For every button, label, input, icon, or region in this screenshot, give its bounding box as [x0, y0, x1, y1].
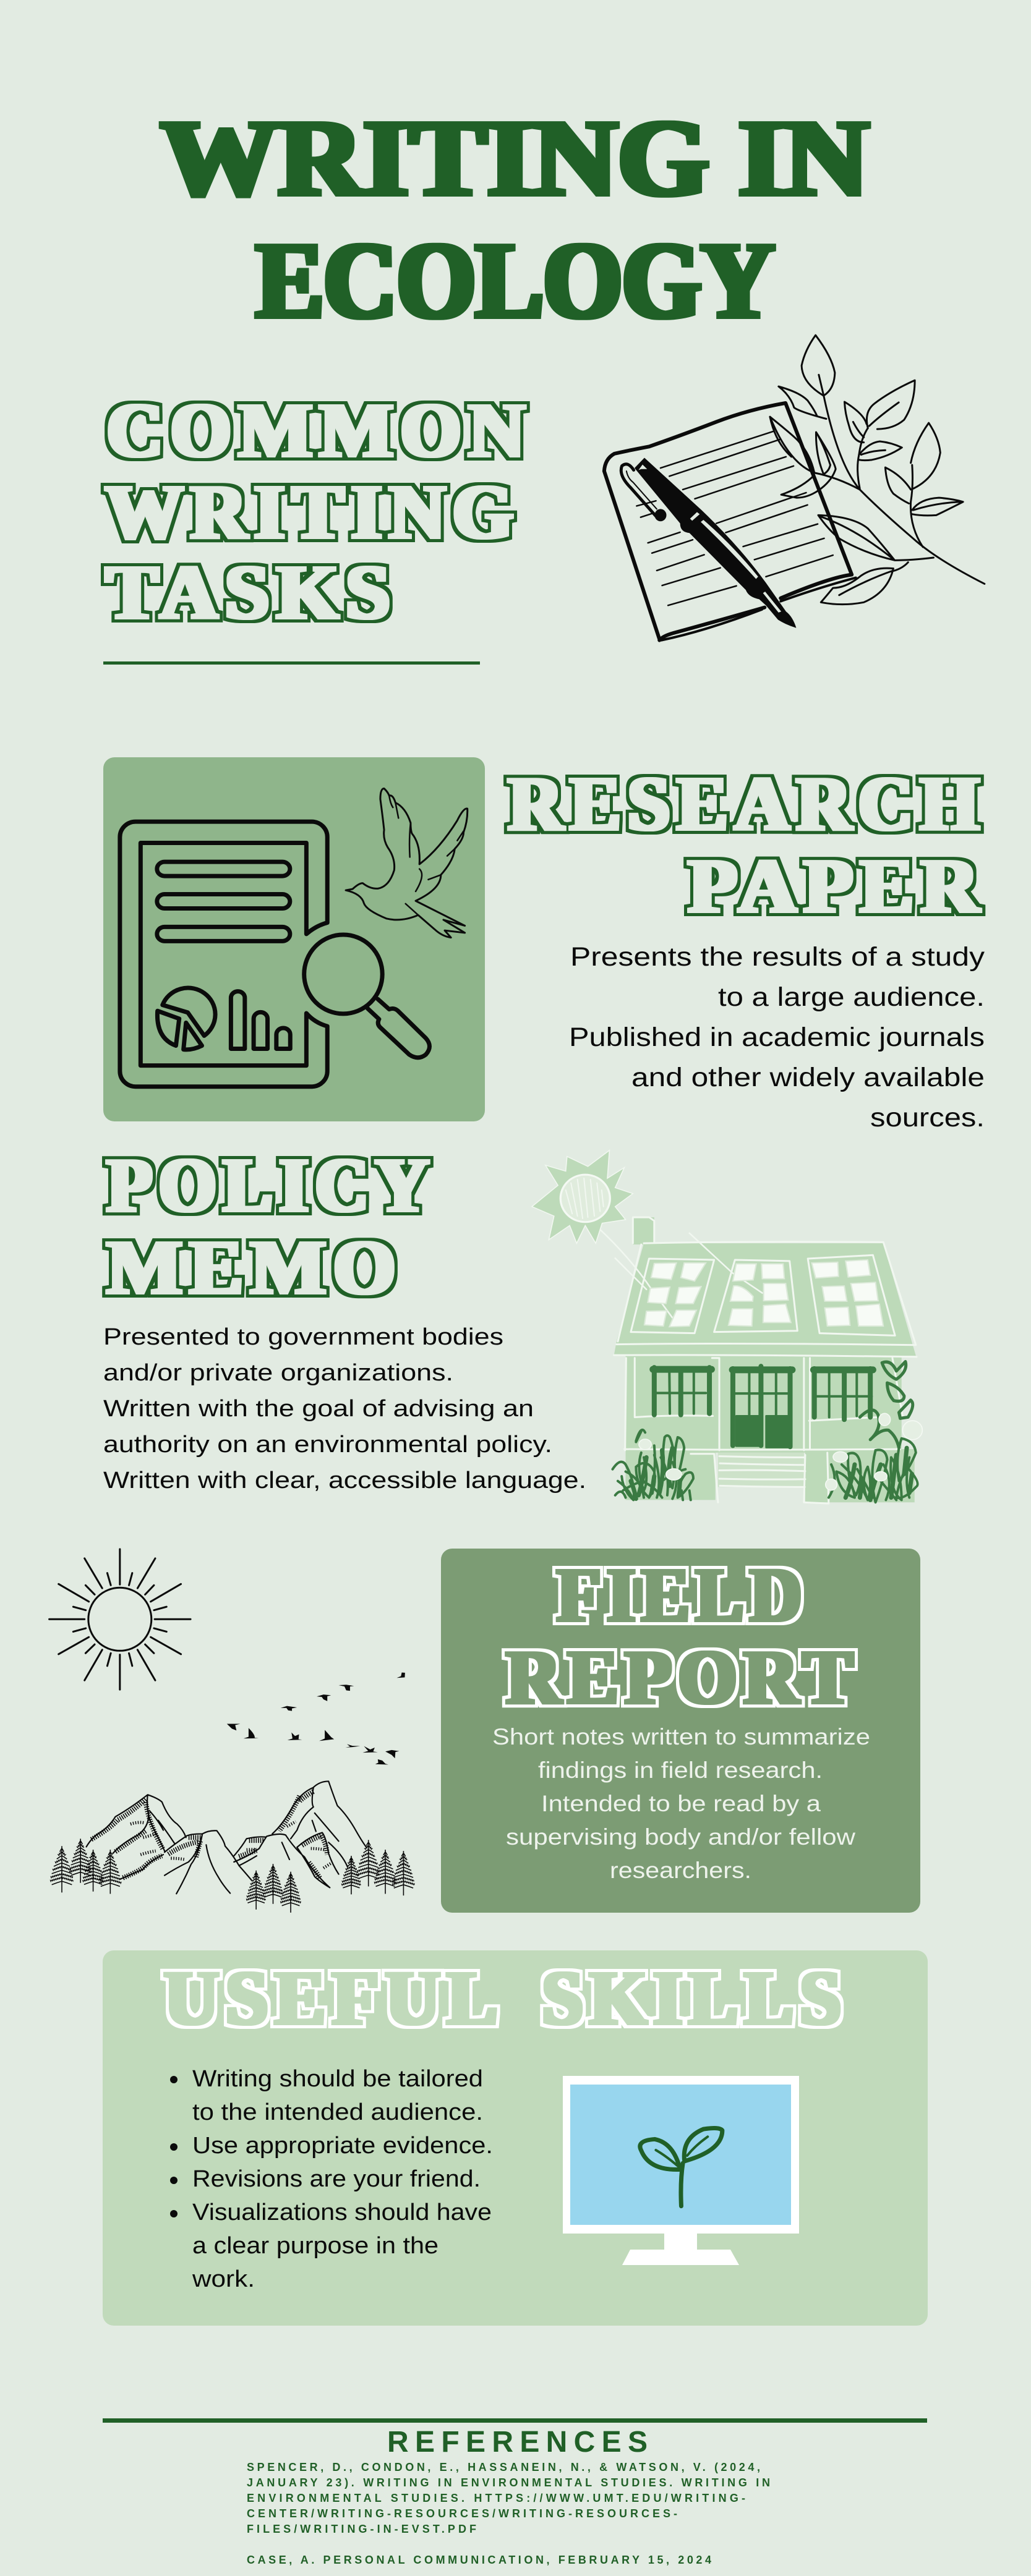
list: skills: a clear purpose in the [192, 2233, 438, 2259]
heading: field report: REPORT [507, 1635, 860, 1720]
heading: references: REFERENCES [387, 2426, 648, 2459]
text: references list: CENTER/WRITING-RESOURCES/WRITING-RESOURCES- [247, 2507, 677, 2520]
heading: useful skills: USEFUL [165, 1956, 505, 2041]
text: field report description: Intended to be read by a [541, 1791, 821, 1816]
heading: useful skills [165, 1956, 848, 2041]
illustration: sun, birds, mountains [49, 1549, 414, 1913]
list: skills: Use appropriate evidence. [192, 2133, 493, 2159]
text: research paper description: to a large audience. [718, 982, 985, 1012]
text: policy memo description: Written with the goal of advising an [103, 1396, 534, 1422]
text: research paper description [569, 942, 985, 1133]
text: research paper description: and other widely available [631, 1063, 985, 1092]
list: skills: Revisions are your friend. [192, 2166, 481, 2192]
heading: research paper: RESEARCH [508, 762, 986, 847]
icon: notebook, pen and leaves [604, 335, 985, 640]
dove [346, 788, 468, 938]
heading: common writing tasks: COMMON [107, 388, 533, 474]
title [161, 98, 869, 341]
text: field report description [492, 1724, 870, 1883]
sun [49, 1549, 190, 1690]
text: references list: CASE, A. PERSONAL COMMUNICATION, FEBRUARY 15, 2024 [247, 2554, 711, 2566]
text: policy memo description: Written with clear, accessible language. [103, 1468, 586, 1494]
pine trees [50, 1838, 414, 1913]
text: policy memo description: Presented to government bodies [103, 1324, 503, 1350]
birds [227, 1672, 405, 1765]
pen [621, 458, 796, 628]
white blossoms [639, 1413, 922, 1490]
left bush [612, 1430, 693, 1500]
list: skills: Visualizations should have [192, 2200, 492, 2225]
right bush [829, 1439, 918, 1502]
text: references list: JANUARY 23). WRITING IN ENVIRONMENTAL STUDIES. WRITING IN [247, 2476, 770, 2489]
text: references list [247, 2461, 770, 2566]
pie chart and bars [157, 988, 290, 1050]
heading: policy memo: MEMO [107, 1225, 403, 1311]
heading: research paper: PAPER [688, 844, 986, 929]
text: field report description: researchers. [610, 1858, 751, 1883]
text: policy memo description: authority on an environmental policy. [103, 1432, 552, 1458]
text: research paper description: Presents the results of a study [570, 942, 985, 972]
text: field report description: findings in field research. [538, 1758, 823, 1783]
list: skills: work. [192, 2266, 255, 2292]
heading: common writing tasks: WRITING [106, 470, 521, 555]
heading: field report [507, 1553, 860, 1720]
text: policy memo description: and/or private organizations. [103, 1360, 453, 1386]
panel: useful skills [103, 1950, 928, 2326]
notebook [604, 403, 856, 640]
heading: useful skills: SKILLS [542, 1956, 848, 2041]
text: research paper description: sources. [870, 1103, 985, 1133]
heading: policy memo [107, 1143, 436, 1311]
heading: policy memo: POLICY [107, 1143, 436, 1228]
sun [532, 1150, 633, 1243]
document [120, 822, 327, 1087]
text: policy memo description [103, 1324, 586, 1494]
title: WRITING IN [161, 98, 869, 219]
title: ECOLOGY [256, 220, 774, 341]
icon: monitor with sprout [563, 2076, 799, 2265]
panel: research paper icon [103, 757, 485, 1121]
heading: common writing tasks: TASKS [106, 550, 398, 635]
heading: research paper [508, 762, 986, 929]
text: research paper description: Published in academic journals [569, 1022, 985, 1052]
climbing vine [860, 1362, 913, 1448]
illustration: house with solar panels and sun [532, 1150, 922, 1503]
text: references list: SPENCER, D., CONDON, E., HASSANEIN, N., & WATSON, V. (2024, [247, 2461, 760, 2473]
list: skills: Writing should be tailored [192, 2066, 483, 2092]
mountains [87, 1781, 366, 1894]
text: references list: FILES/WRITING-IN-EVST.PDF [247, 2523, 476, 2535]
text: references list: ENVIRONMENTAL STUDIES. HTTPS://WWW.UMT.EDU/WRITING- [247, 2492, 745, 2504]
divider: references rule [103, 2418, 927, 2423]
leaves [770, 335, 985, 605]
list: skills [170, 2066, 493, 2292]
list: skills: to the intended audience. [192, 2099, 483, 2125]
text: field report description: supervising body and/or fellow [506, 1824, 855, 1850]
house body [601, 1217, 917, 1503]
heading: common writing tasks [106, 388, 533, 635]
heading: field report: FIELD [557, 1553, 808, 1638]
solar panel cells [644, 1260, 883, 1327]
panel: field report [441, 1549, 920, 1913]
windows and door [653, 1366, 873, 1447]
icon: document with magnifier and dove [120, 788, 468, 1087]
text: field report description: Short notes written to summarize [492, 1724, 870, 1749]
magnifier [304, 935, 429, 1058]
